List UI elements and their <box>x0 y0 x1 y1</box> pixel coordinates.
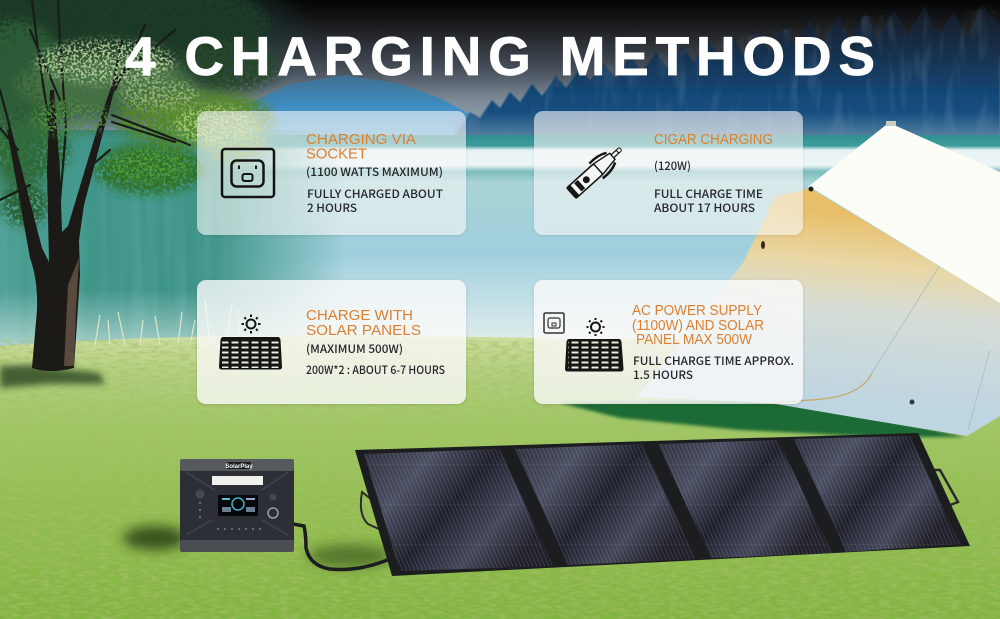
power station <box>180 459 294 552</box>
tree branches <box>0 0 190 265</box>
charge time text: ABOUT 17 HOURS <box>654 200 755 216</box>
station base band <box>180 540 294 552</box>
icon: sun <box>242 314 260 334</box>
pine forest texture <box>466 8 1000 132</box>
heading: CHARGE WITH <box>306 308 413 324</box>
tree <box>0 0 290 371</box>
station side buttons <box>200 502 262 529</box>
card background <box>534 111 803 235</box>
distant hills <box>240 75 490 140</box>
tent fly canopy <box>808 125 1000 303</box>
panel cells <box>364 436 960 571</box>
trunk highlight <box>64 258 79 366</box>
panel shadow <box>308 544 392 568</box>
icon: sun <box>586 318 604 336</box>
icon: AC socket <box>222 149 274 197</box>
right handle <box>928 470 958 507</box>
tent door seam <box>770 373 872 403</box>
wattage text: (1100 WATTS MAXIMUM) <box>306 164 443 180</box>
tree trunk <box>7 78 117 371</box>
charge time text: FULL CHARGE TIME APPROX. <box>633 353 794 369</box>
station body <box>180 459 294 552</box>
panel: cigar charging <box>534 111 803 235</box>
panel: AC power supply and solar <box>534 280 803 404</box>
tent anchor dot <box>761 241 765 249</box>
pine forest <box>455 4 1000 140</box>
heading: CIGAR CHARGING <box>654 132 773 148</box>
tree canopy front highlights <box>0 0 290 235</box>
heading <box>306 308 421 339</box>
wattage text: (MAXIMUM 500W) <box>306 341 403 357</box>
charge time text: 200W*2 : ABOUT 6-7 HOURS <box>306 362 445 378</box>
charge time text <box>307 186 443 216</box>
station top band <box>180 459 294 471</box>
charge time text <box>654 186 763 216</box>
charge time text <box>633 353 794 383</box>
lake streaks <box>4 170 211 318</box>
icon: solar panel <box>565 339 624 372</box>
station screen <box>218 495 258 516</box>
canopy mass <box>0 0 260 198</box>
panel: charging via socket <box>197 111 466 235</box>
heading: (1100W) AND SOLAR <box>632 318 764 334</box>
heading: SOCKET <box>306 146 367 162</box>
charge time text: FULLY CHARGED ABOUT <box>307 186 443 202</box>
tent body <box>637 188 1000 436</box>
shadowed backdrop behind tree <box>0 0 315 140</box>
lake <box>0 135 1000 350</box>
tent peg mark <box>910 400 914 404</box>
station power button <box>196 490 204 498</box>
heading <box>306 132 416 162</box>
shoreline haze <box>455 112 1000 138</box>
station right button <box>270 494 276 500</box>
solar panel <box>355 433 970 576</box>
heading: PANEL MAX 500W <box>636 332 752 348</box>
charge time text: 1.5 HOURS <box>633 367 693 383</box>
icon: small socket <box>544 313 564 333</box>
heading <box>632 303 764 348</box>
heading: SOLAR PANELS <box>306 323 421 339</box>
lake reflection left <box>0 130 345 350</box>
card background <box>197 111 466 235</box>
card background <box>534 280 803 404</box>
grass texture <box>0 340 1000 619</box>
station light bar <box>212 476 263 485</box>
wattage text: (120W) <box>654 158 691 174</box>
station face lines <box>186 472 288 535</box>
icon: cigar lighter plug <box>565 141 627 201</box>
tent <box>637 121 1000 436</box>
icon: solar panel <box>219 337 282 370</box>
tent apex vent <box>886 121 896 126</box>
station brand badge: SolarPlay <box>225 464 253 470</box>
lake shore fade <box>0 290 340 350</box>
tree shadow <box>0 365 105 388</box>
panel frame <box>355 433 970 576</box>
card background <box>197 280 466 404</box>
power station shadow <box>123 526 187 550</box>
station dial <box>268 508 278 518</box>
charging cable <box>293 524 392 570</box>
sky <box>0 0 1000 140</box>
tree canopy back <box>0 0 290 235</box>
tent fabric seam <box>872 265 990 430</box>
charge time text: FULL CHARGE TIME <box>654 186 763 202</box>
tent clip <box>808 186 814 192</box>
title: 4 CHARGING METHODS <box>125 25 875 87</box>
heading: CHARGING VIA <box>306 132 416 148</box>
charge time text: 2 HOURS <box>307 200 357 216</box>
grass field <box>0 335 1000 619</box>
left handle <box>361 492 381 530</box>
tent shadow on grass <box>560 400 965 437</box>
heading: AC POWER SUPPLY <box>632 303 762 319</box>
panel: charge with solar panels <box>197 280 466 404</box>
reeds <box>95 300 240 345</box>
